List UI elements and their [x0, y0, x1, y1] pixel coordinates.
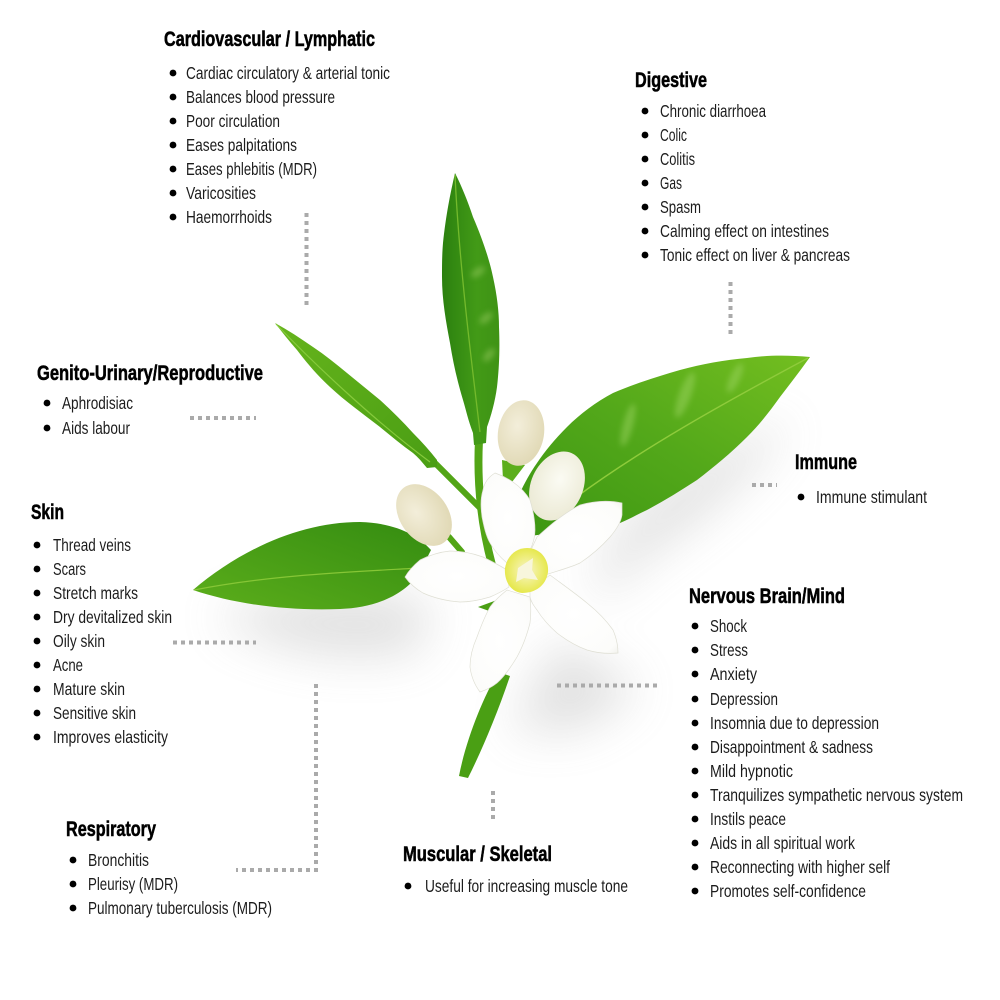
list: nervous: Aids in all spiritual work	[710, 833, 855, 853]
flower stamens	[516, 558, 538, 582]
list: skin: Improves elasticity	[53, 727, 168, 747]
list: nervous	[692, 616, 963, 901]
list: genito-urinary	[44, 393, 133, 438]
list: immune: Immune stimulant	[816, 487, 927, 507]
list: nervous: Stress	[710, 640, 748, 660]
list: skin: Stretch marks	[53, 583, 138, 603]
heading: nervous: Nervous Brain/Mind	[689, 584, 845, 608]
list: cardiovascular	[170, 63, 390, 227]
list: skin: Scars	[53, 559, 86, 579]
list: skin: Acne	[53, 655, 83, 675]
list: skin	[34, 535, 172, 747]
list: digestive	[642, 101, 850, 265]
stem: lower	[459, 600, 510, 778]
list: respiratory: Bronchitis	[88, 850, 149, 870]
connector: digestive	[728, 282, 732, 334]
heading: muscular: Muscular / Skeletal	[403, 842, 552, 866]
bud: right	[519, 443, 595, 529]
connector: muscular	[491, 791, 495, 820]
heading: genito-urinary: Genito-Urinary/Reproductive	[37, 361, 263, 385]
list: respiratory: Pulmonary tuberculosis (MDR)	[88, 898, 272, 918]
flower petals	[405, 473, 622, 692]
list: cardiovascular: Cardiac circulatory & arterial tonic	[186, 63, 390, 83]
connector: nervous	[557, 684, 658, 688]
list: nervous: Reconnecting with higher self	[710, 857, 890, 877]
connector: respiratory	[236, 684, 316, 870]
panel: skin	[31, 500, 172, 747]
list: skin: Oily skin	[53, 631, 105, 651]
list: genito-urinary: Aphrodisiac	[62, 393, 133, 413]
flower centre	[505, 548, 548, 593]
list: nervous: Instils peace	[710, 809, 786, 829]
leaf: upper left	[275, 323, 437, 468]
leaf highlights: right	[617, 361, 746, 448]
bud: top	[493, 397, 549, 469]
leaf: top	[442, 173, 499, 445]
panel: muscular	[403, 842, 628, 896]
panel: cardiovascular	[164, 27, 390, 227]
list: nervous: Shock	[710, 616, 747, 636]
list: digestive: Spasm	[660, 197, 701, 217]
heading: cardiovascular: Cardiovascular / Lymphatic	[164, 27, 375, 51]
panel: digestive	[635, 68, 850, 265]
stems	[435, 440, 492, 565]
list: nervous: Anxiety	[710, 664, 757, 684]
heading: digestive: Digestive	[635, 68, 707, 92]
heading: skin: Skin	[31, 500, 64, 524]
calyx of top bud	[502, 460, 525, 482]
list: cardiovascular: Eases phlebitis (MDR)	[186, 159, 317, 179]
list: digestive: Tonic effect on liver & pancreas	[660, 245, 850, 265]
list: digestive: Colitis	[660, 149, 695, 169]
list: nervous: Insomnia due to depression	[710, 713, 879, 733]
list: skin: Mature skin	[53, 679, 125, 699]
list: digestive: Gas	[660, 173, 682, 193]
plant: neroli sprig with flower	[193, 173, 810, 778]
list: respiratory: Pleurisy (MDR)	[88, 874, 178, 894]
leaf: right	[520, 356, 810, 536]
list: cardiovascular: Varicosities	[186, 183, 256, 203]
list: muscular: Useful for increasing muscle tone	[425, 876, 628, 896]
list: nervous: Disappointment & sadness	[710, 737, 873, 757]
bud: left	[385, 473, 463, 557]
heading: respiratory: Respiratory	[66, 817, 156, 841]
list: digestive: Colic	[660, 125, 687, 145]
list: skin: Dry devitalized skin	[53, 607, 172, 627]
list: digestive: Chronic diarrhoea	[660, 101, 766, 121]
list: genito-urinary: Aids labour	[62, 418, 130, 438]
leaf highlights: top	[469, 264, 497, 364]
list: respiratory	[70, 850, 272, 918]
panel: immune	[795, 450, 927, 507]
soft drop shadow	[215, 420, 790, 730]
list: skin: Sensitive skin	[53, 703, 136, 723]
leaf: left	[193, 522, 431, 609]
list: cardiovascular: Balances blood pressure	[186, 87, 335, 107]
connector: immune	[752, 483, 777, 487]
connector: genito-urinary	[190, 416, 256, 420]
panel: genito-urinary	[37, 361, 263, 438]
list: skin: Thread veins	[53, 535, 131, 555]
connector: skin	[173, 640, 256, 644]
list: cardiovascular: Poor circulation	[186, 111, 280, 131]
list: digestive: Calming effect on intestines	[660, 221, 829, 241]
panel: respiratory	[66, 817, 272, 918]
list: cardiovascular: Haemorrhoids	[186, 207, 272, 227]
heading: immune: Immune	[795, 450, 857, 474]
list: nervous: Depression	[710, 689, 778, 709]
connector: cardiovascular	[304, 213, 308, 305]
panel: nervous	[689, 584, 963, 901]
list: cardiovascular: Eases palpitations	[186, 135, 297, 155]
list: nervous: Promotes self-confidence	[710, 881, 866, 901]
list: nervous: Mild hypnotic	[710, 761, 793, 781]
